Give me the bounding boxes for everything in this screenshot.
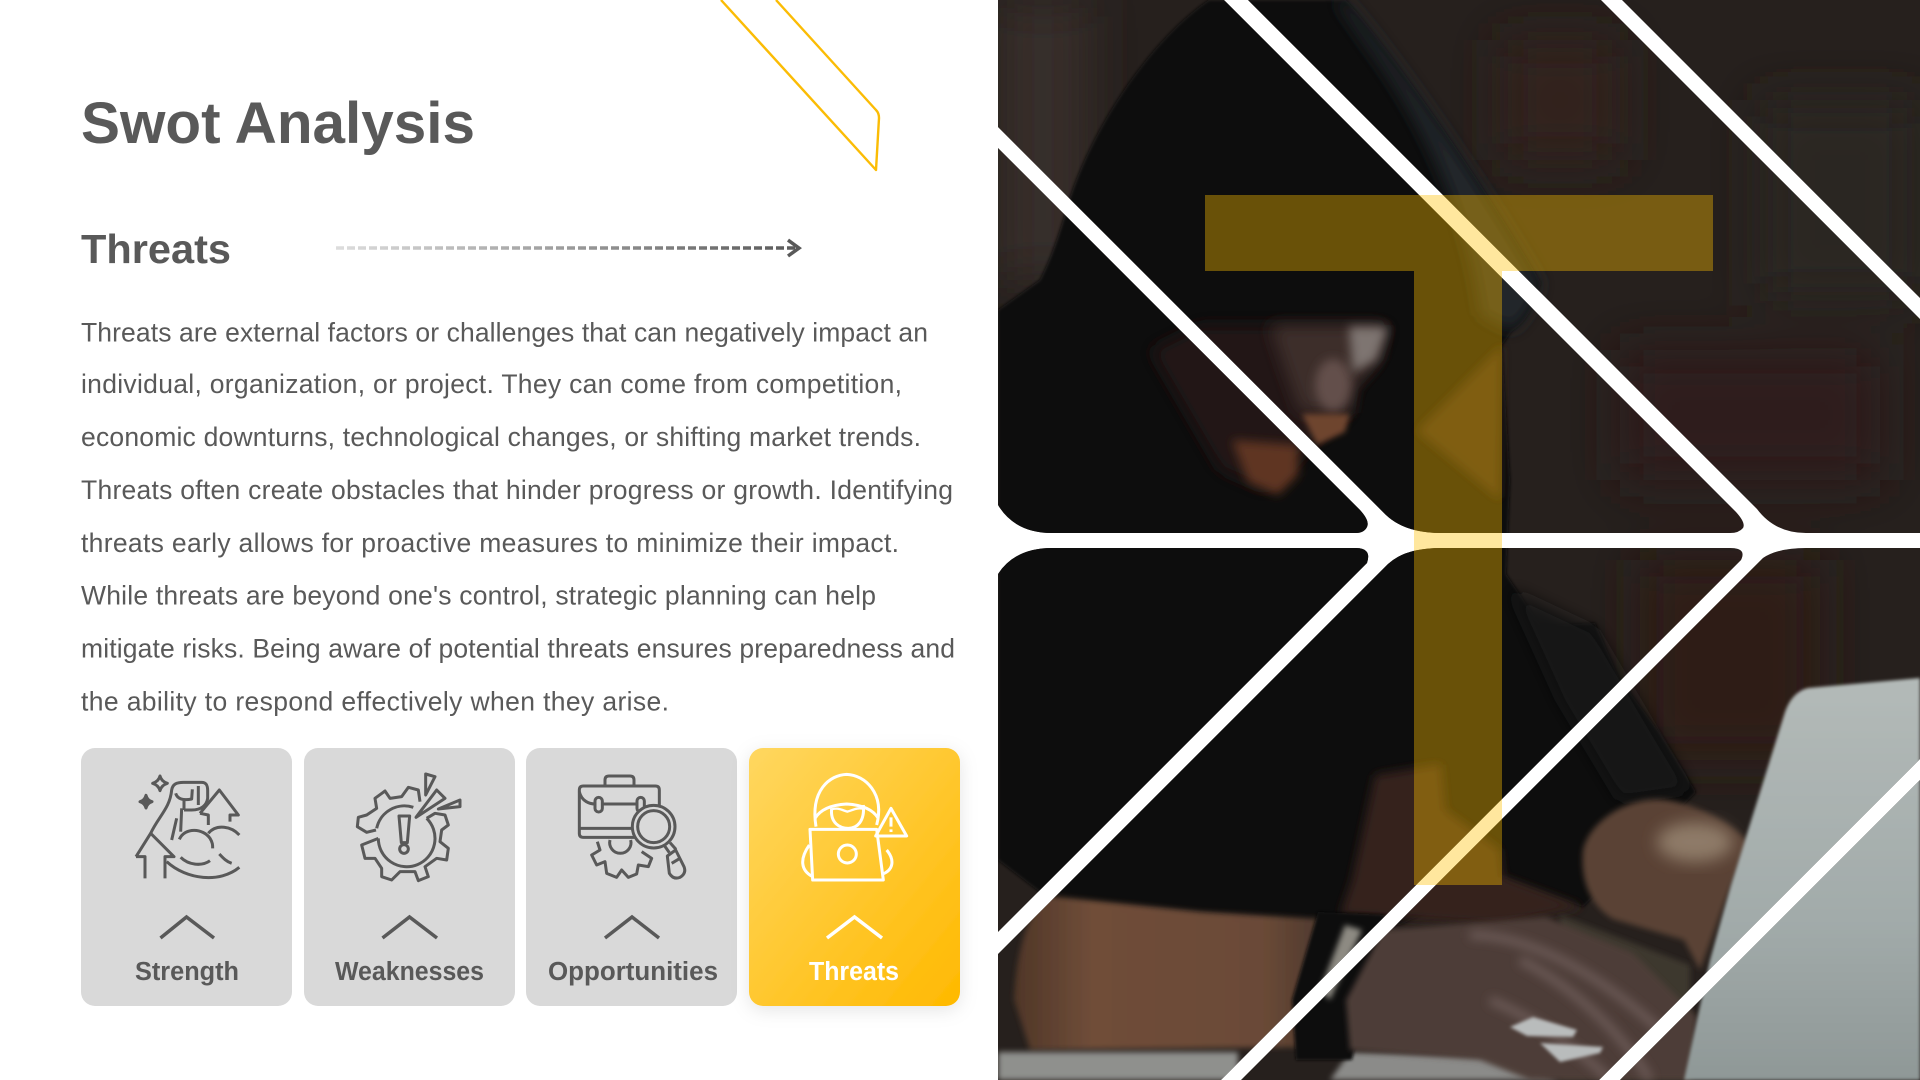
body text: the ability to respond effectively when they arise. [81,686,669,716]
wrist bands [1292,912,1385,1060]
body text [81,318,955,716]
card: Opportunities [526,748,737,1006]
hood and torso [998,0,1696,925]
icon: hooded hacker with laptop [803,774,907,880]
face and beard [1150,325,1390,495]
icon: broken gear with warning [357,774,460,881]
body text: individual, organization, or project. They can come from competition, [81,369,902,399]
label: Weaknesses [335,958,484,986]
title: Swot Analysis [81,91,475,156]
body text: economic downturns, technological changes, or shifting market trends. [81,422,921,452]
laptop [1684,678,1920,1080]
brown wedge between hood and shoulder [1417,345,1502,500]
section heading: Threats [81,226,231,272]
body text: threats early allows for proactive measures to minimize their impact. [81,528,899,558]
decorative yellow outline strip [721,0,879,170]
icon: flexed arm with arrows [136,776,239,878]
dashed arrow [336,240,799,256]
body text: mitigate risks. Being aware of potential threats ensures preparedness and [81,634,955,664]
card: Threats (active) [749,748,960,1006]
keyboard keys [1510,1017,1603,1062]
label: Threats [809,958,899,986]
body text: While threats are beyond one's control, strategic planning can help [81,580,876,610]
gap of brown behind arm [1340,764,1583,925]
label: Strength [135,958,239,986]
icon: briefcase, gear and magnifier [579,776,685,878]
table behind hand [1560,915,1690,1080]
card: Weaknesses [304,748,515,1006]
body text: Threats are external factors or challenges that can negatively impact an [81,318,928,348]
chevron [382,917,437,938]
body text: Threats often create obstacles that hinder progress or growth. Identifying [81,475,953,505]
right forearm [1582,799,1749,970]
panel: photo of hooded hacker cut into diagonal strips [998,0,1920,1080]
chevron [160,917,214,938]
chevron [827,917,882,938]
left forearm [1014,896,1322,1050]
big letter T overlay [1205,195,1713,885]
chevron [605,917,659,938]
card: Strength [81,748,292,1006]
hand [1346,917,1697,1080]
label: Opportunities [548,958,718,986]
